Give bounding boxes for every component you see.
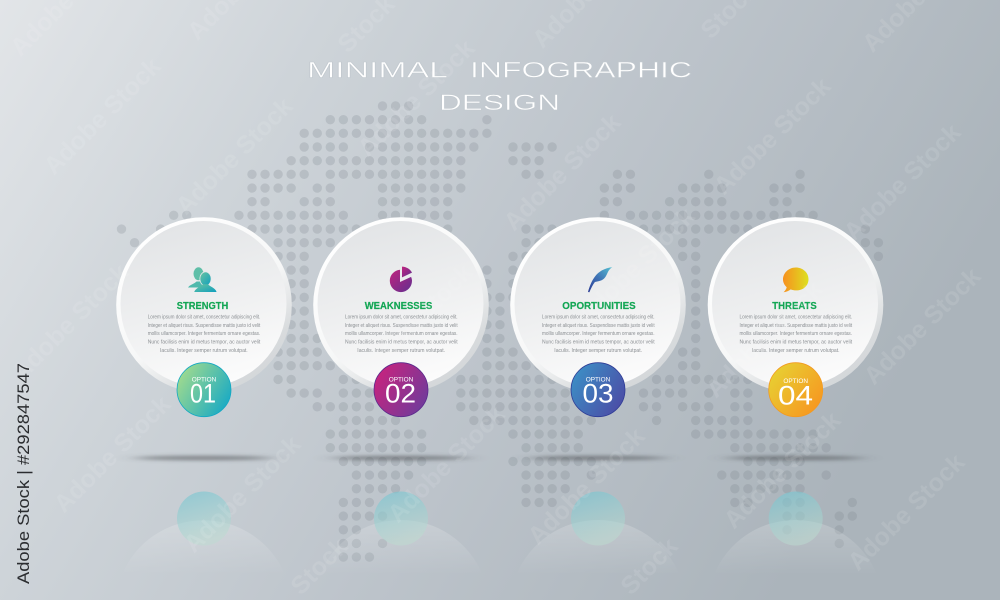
icon: feather <box>588 267 612 292</box>
badge: option 02 <box>374 363 428 417</box>
stock watermarks: Stock <box>285 532 353 600</box>
body text: mollis ullamcorper. Integer fermentum ornare egestas. <box>148 331 260 337</box>
stock watermarks: Adobe Stock <box>858 262 986 390</box>
panel: opportunities <box>510 217 686 417</box>
badge: option 04 <box>769 363 823 417</box>
stock watermarks: Adobe Stock <box>572 202 700 330</box>
body text: Lorem ipsum dolor sit amet, consectetur adipiscing elit. <box>740 314 852 320</box>
body text: Integer et aliquet risus. Suspendisse mattis justo id velit <box>740 323 853 329</box>
badge: option 01: OPTION <box>192 376 216 383</box>
body text: Lorem ipsum dolor sit amet, consectetur adipiscing elit. <box>345 314 458 320</box>
dotted world map <box>122 106 879 557</box>
title: DESIGN <box>439 90 560 115</box>
body text: Nunc facilisis enim id metus tempor, ac auctor velit <box>148 340 261 346</box>
stock watermarks: Adobe Stock <box>498 108 626 236</box>
stock watermarks: Adobe Stock <box>178 430 306 558</box>
body text: Nunc facilisis enim id metus tempor, ac auctor velit <box>542 340 655 346</box>
title <box>307 57 692 115</box>
body text: Lorem ipsum dolor sit amet, consectetur adipiscing elit. <box>542 314 655 320</box>
badge: option 02: 02 <box>385 378 416 408</box>
badge: option 01: 01 <box>190 378 216 408</box>
body text: Nunc facilisis enim id metus tempor, ac auctor velit <box>345 340 458 346</box>
title: INFOGRAPHIC <box>470 57 692 82</box>
body text: mollis ullamcorper. Integer fermentum ornare egestas. <box>345 331 458 337</box>
body text <box>542 314 655 354</box>
stock watermarks: Adobe Stock <box>522 422 650 550</box>
body text: Integer et aliquet risus. Suspendisse mattis justo id velit <box>542 323 655 329</box>
icon: pie chart <box>390 267 412 292</box>
title: MINIMAL <box>307 57 448 82</box>
stock watermarks: Adobe Stock <box>842 448 970 576</box>
body text: Integer et aliquet risus. Suspendisse mattis justo id velit <box>148 323 261 329</box>
reflection domes <box>122 520 877 575</box>
badge: option 04: 04 <box>778 380 813 410</box>
body text: Iaculis. Integer semper rutrum volutpat. <box>752 348 839 354</box>
stock watermarks: Adobe Stock <box>170 92 298 220</box>
heading: OPORTUNITIES <box>562 301 636 312</box>
stock watermarks: Adobe Stock <box>718 406 846 534</box>
stock watermarks: Adobe Stock <box>6 258 134 386</box>
body text: mollis ullamcorper. Integer fermentum ornare egestas. <box>542 331 655 337</box>
body text: Integer et aliquet risus. Suspendisse mattis justo id velit <box>345 323 458 329</box>
heading: STRENGTH <box>177 301 228 312</box>
body text <box>148 314 261 354</box>
body text: Lorem ipsum dolor sit amet, consectetur adipiscing elit. <box>148 314 260 320</box>
stock watermarks: Adobe Stock <box>838 118 966 246</box>
stock watermarks: Adobe Stock <box>48 390 176 518</box>
stock watermarks: Stock <box>615 532 683 600</box>
icon: people <box>188 267 217 292</box>
body text: Nunc facilisis enim id metus tempor, ac auctor velit <box>740 340 853 346</box>
heading: THREATS <box>772 301 817 312</box>
badge: option 03: OPTION <box>586 376 610 383</box>
floor shadows <box>135 456 863 460</box>
heading: WEAKNESSES <box>365 301 433 312</box>
panel: strength <box>116 217 292 417</box>
stock watermarks: Adobe Stock <box>38 52 166 180</box>
stock watermarks: Adobe Stock <box>700 275 828 403</box>
body text: Iaculis. Integer semper rutrum volutpat. <box>357 348 445 354</box>
reflection discs <box>177 492 823 546</box>
panel: threats <box>708 217 883 417</box>
body text: mollis ullamcorper. Integer fermentum ornare egestas. <box>740 331 852 337</box>
badge: option 02: OPTION <box>389 376 413 383</box>
icon: speech bubble <box>783 268 808 292</box>
body text <box>345 314 458 354</box>
stock watermarks: Adobe Stock <box>352 34 480 162</box>
badge: option 03 <box>571 363 625 417</box>
stock watermarks: Adobe Stock <box>708 72 836 200</box>
stock watermarks: Adobe Stock <box>350 258 478 386</box>
body text <box>740 314 853 354</box>
body text: Iaculis. Integer semper rutrum volutpat. <box>160 348 248 354</box>
stock id side label: Adobe Stock | #292847547 <box>14 363 33 584</box>
panel: weaknesses <box>313 217 489 417</box>
badge: option 04: OPTION <box>783 378 808 385</box>
body text: Iaculis. Integer semper rutrum volutpat. <box>554 348 642 354</box>
badge: option 03: 03 <box>582 378 613 408</box>
stock watermarks: Adobe Stock <box>382 400 510 528</box>
badge: option 01 <box>177 363 231 417</box>
